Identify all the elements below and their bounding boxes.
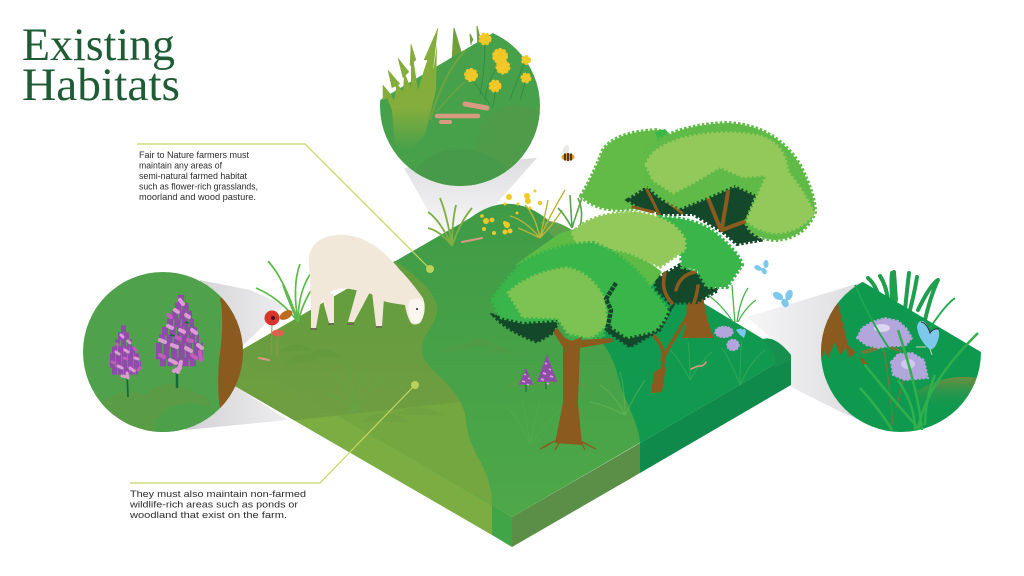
middle tree: [515, 212, 742, 393]
callout line: non-farmed: [130, 381, 419, 483]
side face: semi-natural strip: [512, 443, 640, 547]
back tree mid foliage: [642, 123, 815, 240]
sheep hooves: [310, 324, 382, 329]
large orchid: [538, 357, 556, 389]
butterfly lower: [771, 289, 794, 309]
surface worm: [691, 362, 706, 369]
orchids on the surface: [520, 357, 556, 392]
detail circle: woodland flowers: [815, 272, 985, 440]
middle tree mid foliage: [515, 225, 662, 288]
left orchid petals: [116, 335, 138, 378]
right circle trunk: [821, 303, 868, 364]
orchid circle trunk: [218, 298, 243, 408]
text block: non-farmed: They must also maintain non-farmed: [130, 488, 306, 499]
surface grass near flowers: [708, 285, 756, 322]
soil mound: [915, 376, 976, 402]
surface: farmed zone: [233, 261, 492, 505]
back hill grass: [428, 190, 582, 246]
bee: [561, 144, 574, 161]
flower stems: [883, 345, 903, 425]
circle ground: [380, 26, 540, 186]
flower upper: [857, 318, 912, 348]
orchid circle mounds: [102, 384, 215, 432]
surface small butterfly: [736, 328, 746, 338]
grass tufts on the surface: [325, 340, 765, 445]
detail circle: orchids: [83, 272, 250, 440]
sheep head: [408, 298, 424, 323]
middle tree right foliage: [660, 217, 742, 287]
right orchid: [156, 299, 203, 388]
title: [22, 19, 180, 111]
front tree roots: [540, 435, 596, 450]
magnifier beam: left: [185, 280, 288, 430]
grass over trunk: [821, 342, 862, 380]
grass blades olive: [382, 28, 466, 150]
front tree shadow foliage right: [605, 307, 672, 347]
grass behind sheep: [256, 261, 318, 322]
sheep body: [309, 235, 425, 324]
surface: semi-natural grassland: [233, 204, 791, 517]
left orchid stem: [127, 372, 128, 397]
text block: farmed habitat: Fair to Nature farmers must: [139, 149, 249, 160]
yellow grass: [510, 190, 565, 238]
back tree light foliage: [646, 133, 814, 233]
surface scabious flowers: [715, 326, 739, 350]
isometric land block: [220, 204, 791, 547]
title: Existing: [22, 19, 175, 71]
orchid circle ground: [83, 272, 243, 432]
front tree trunk: [553, 328, 613, 445]
flower leaves: [860, 346, 903, 354]
buttercup flowers: [465, 34, 530, 92]
middle tree light foliage: [572, 212, 685, 267]
back grass: [868, 272, 938, 320]
text block: farmed habitat: [139, 149, 258, 202]
yellow flowers on the hill: [480, 190, 542, 235]
poppy head: [264, 310, 280, 326]
back tree canopy highlight: [655, 129, 672, 145]
text block: farmed habitat: such as flower-rich grasslands,: [139, 180, 258, 192]
grass tips above the circle: [383, 28, 438, 100]
butterfly upper: [753, 260, 769, 275]
text block: non-farmed: wildlife-rich areas such as ponds or: [129, 498, 298, 510]
side face: woodland strip: [640, 355, 791, 473]
detail circle: buttercups and worms: [380, 26, 545, 195]
grass tuft on the hill: [428, 198, 472, 246]
front tree canopy: [492, 243, 668, 337]
surface: back hill mound: [540, 221, 590, 245]
poppy flowers: [259, 308, 294, 360]
mound front: [415, 172, 505, 186]
front tree: [492, 243, 672, 450]
magnifier beam: top: [404, 158, 537, 235]
green grass by tree: [558, 195, 582, 228]
side face: farmed strip: [233, 355, 492, 535]
text block: non-farmed: [129, 488, 306, 520]
left orchid: [110, 329, 141, 397]
mound back: [470, 112, 540, 186]
poppy stems: [271, 325, 277, 356]
sheep eye: [416, 308, 418, 310]
small worm: [259, 358, 269, 360]
poppy bud: [272, 330, 284, 336]
faint mounds on the surface: [278, 338, 590, 422]
back trunk: [682, 297, 714, 338]
flower lower: [891, 353, 928, 380]
right orchid stem: [176, 368, 178, 388]
left orchid spike: [110, 329, 141, 371]
front tree light foliage: [508, 268, 607, 337]
front tree shadow foliage left: [493, 315, 560, 342]
back tree shadow foliage: [628, 182, 760, 244]
text block: farmed habitat: maintain any areas of: [139, 160, 222, 170]
butterfly: [916, 321, 939, 355]
right circle ground: [815, 282, 981, 440]
right orchid petals: [160, 300, 202, 372]
middle tree branches: [654, 272, 698, 390]
middle tree shadow foliage: [655, 265, 718, 303]
right orchid spike: [156, 299, 203, 362]
text block: farmed habitat: semi-natural farmed habitat: [139, 170, 247, 181]
front grass: [860, 330, 978, 430]
magnifier beam: right: [747, 282, 863, 420]
front tree canopy dark gap: [606, 283, 616, 331]
surface: woodland zone: [595, 255, 791, 443]
text block: farmed habitat: moorland and wood pasture.: [139, 191, 256, 202]
surface: shaded upper farmed zone: [235, 261, 460, 420]
middle tree base roots: [651, 366, 666, 393]
back tree left canopy: [581, 130, 690, 210]
worms: [437, 104, 487, 122]
title: Habitats: [22, 59, 180, 111]
back tree branches: [633, 190, 746, 230]
side face: front corner: [492, 505, 512, 547]
surface: right corner hill: [762, 339, 791, 368]
text block: non-farmed: woodland that exist on the farm.: [129, 509, 287, 520]
callout line: farmed habitat: [137, 144, 434, 273]
orange insect: [278, 308, 294, 322]
dark grass behind: [452, 26, 483, 62]
worm on the hill: [462, 238, 482, 242]
sheep legs: [310, 280, 384, 328]
small orchid: [520, 369, 532, 392]
back tree: [581, 123, 815, 338]
sheep: [309, 235, 425, 329]
buttercup stems: [471, 42, 526, 108]
